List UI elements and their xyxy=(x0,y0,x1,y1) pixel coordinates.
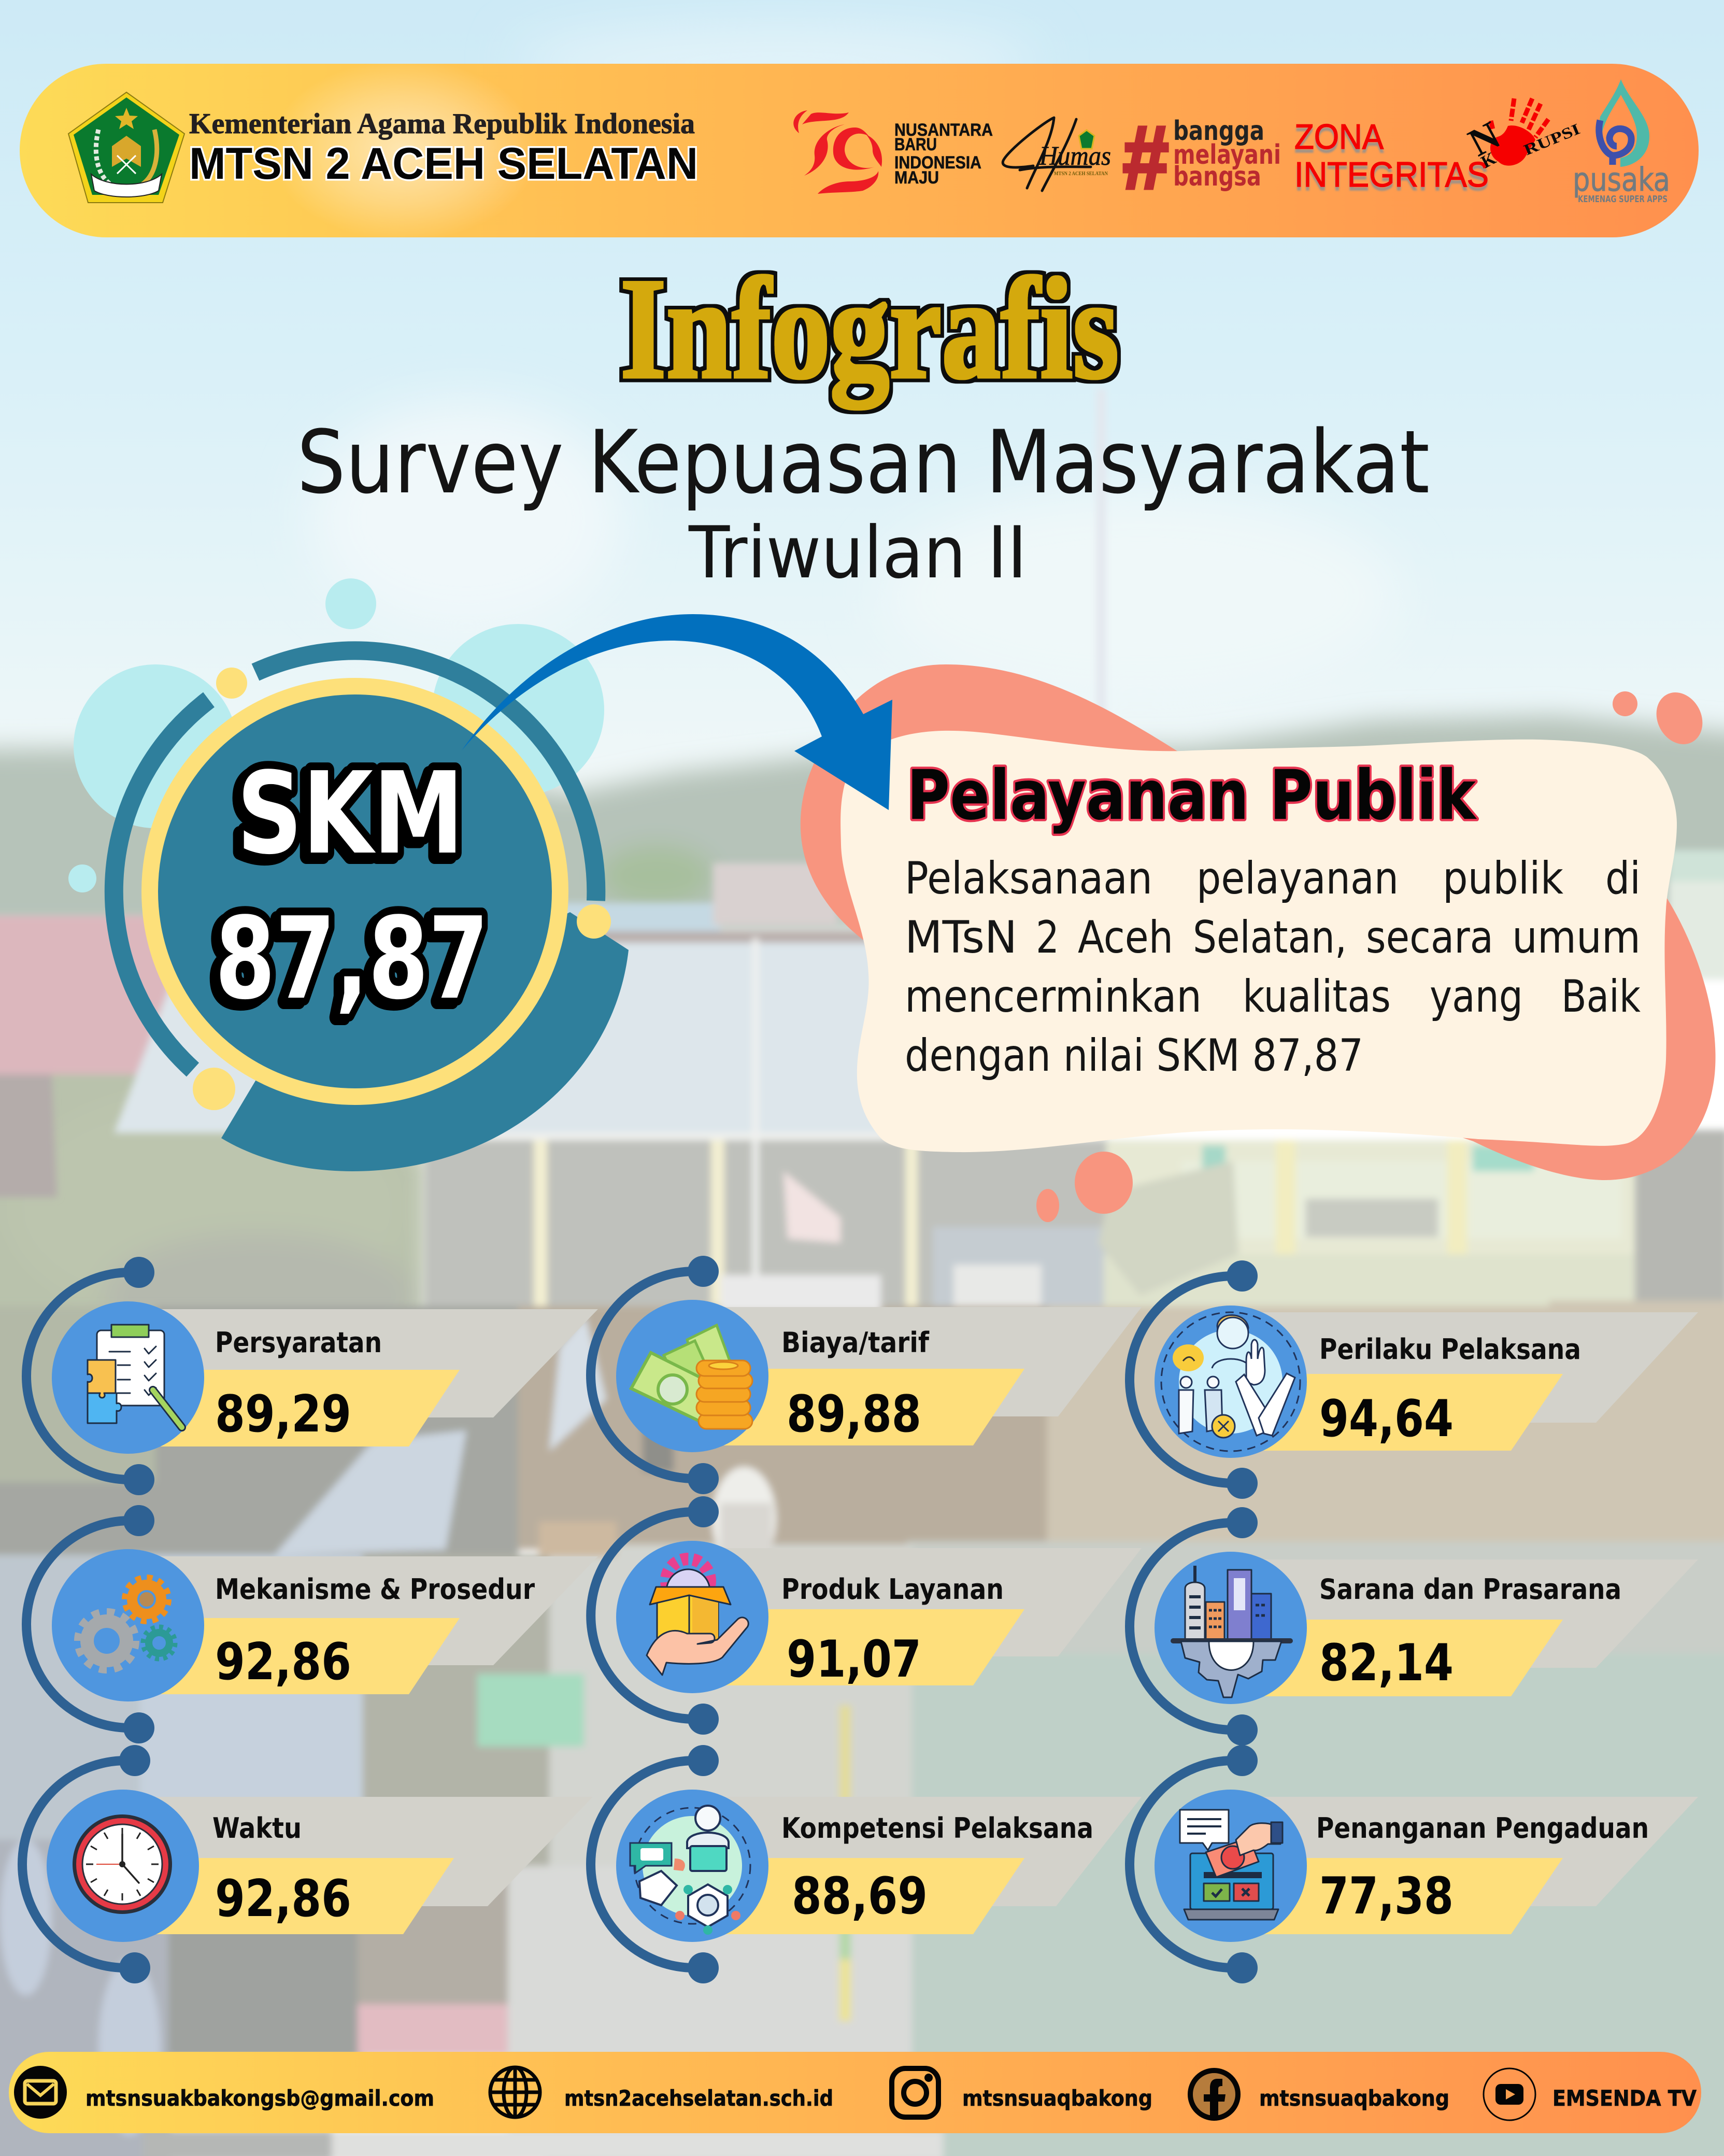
label: Kompetensi Pelaksana xyxy=(781,1812,1093,1845)
value: 89,88 xyxy=(787,1385,921,1444)
icon: complaint laptop xyxy=(1180,1810,1283,1920)
logo tagline: INDONESIA xyxy=(894,153,981,173)
panel body text: mencerminkan xyxy=(905,971,1202,1023)
period: Triwulan II xyxy=(688,511,1027,594)
no korupsi logo: N xyxy=(1462,113,1507,165)
card: Mekanisme & Prosedur xyxy=(26,1505,598,1743)
pusaka logo: pusaka xyxy=(1573,161,1670,198)
panel body text: dengan nilai SKM 87,87 xyxy=(905,1030,1363,1082)
card: Produk Layanan xyxy=(591,1496,1142,1735)
logo tagline xyxy=(894,120,993,188)
label: Mekanisme & Prosedur xyxy=(215,1573,535,1606)
value: 92,86 xyxy=(215,1869,351,1928)
hashtag slogan: bangga xyxy=(1173,116,1264,147)
panel body text xyxy=(905,853,1641,1082)
label: Produk Layanan xyxy=(781,1573,1004,1606)
panel body text: Baik xyxy=(1561,971,1641,1023)
Humas logo: Humas xyxy=(1039,141,1111,171)
icon: service behaviour xyxy=(1161,1312,1300,1451)
subtitle: Survey Kepuasan Masyarakat xyxy=(297,412,1430,513)
arrow xyxy=(462,614,892,810)
panel body text: pelayanan xyxy=(1196,853,1399,904)
icon: youtube xyxy=(1484,2068,1535,2120)
panel body text: Aceh xyxy=(1078,912,1173,963)
icon: gears xyxy=(78,1578,175,1670)
value: 92,86 xyxy=(215,1633,351,1692)
icon: competence xyxy=(630,1806,750,1935)
card: Biaya/tarif xyxy=(591,1256,1142,1494)
no korupsi logo: K xyxy=(1478,149,1500,172)
panel body text: publik xyxy=(1443,853,1563,904)
school name: MTSN 2 ACEH SELATAN xyxy=(189,139,698,189)
hashtag slogan xyxy=(1123,108,1281,207)
card: Waktu xyxy=(22,1745,593,1983)
label: Biaya/tarif xyxy=(781,1326,929,1359)
value: 91,07 xyxy=(787,1630,921,1689)
youtube channel: EMSENDA TV xyxy=(1552,2086,1697,2111)
value: 94,64 xyxy=(1319,1389,1454,1449)
logo tagline: BARU xyxy=(894,135,937,154)
panel body text: yang xyxy=(1430,971,1523,1023)
SKM score badge xyxy=(68,578,629,1171)
panel body text: 2 xyxy=(1036,912,1059,963)
icon: 79 anniversary logo xyxy=(793,110,882,194)
SKM label: SKM xyxy=(237,748,464,880)
icon: email xyxy=(14,2066,67,2119)
zona integritas: ZONA xyxy=(1294,117,1384,157)
panel body text: Selatan, xyxy=(1193,912,1347,963)
card: Penanganan Pengaduan xyxy=(1130,1745,1698,1983)
zona integritas: INTEGRITAS xyxy=(1294,155,1489,194)
panel body text: umum xyxy=(1512,912,1641,963)
label: Perilaku Pelaksana xyxy=(1319,1333,1581,1366)
footer contact bar xyxy=(9,2052,1701,2133)
panel heading: Pelayanan Publik xyxy=(907,756,1477,835)
card: Kompetensi Pelaksana xyxy=(591,1745,1142,1983)
icon: globe xyxy=(490,2067,540,2117)
icon: facebook xyxy=(1190,2070,1238,2119)
pusaka logo: KEMENAG SUPER APPS xyxy=(1578,194,1668,205)
pusaka logo xyxy=(1573,79,1670,205)
panel body text: MTsN xyxy=(905,912,1017,963)
hashtag slogan: melayani xyxy=(1173,139,1281,171)
value: 77,38 xyxy=(1319,1867,1454,1926)
panel body text: secara xyxy=(1366,912,1493,963)
panel: Pelayanan Publik xyxy=(462,614,1716,1222)
title: Infografis: Infografis xyxy=(620,248,1119,412)
value: 89,29 xyxy=(215,1385,351,1444)
label: Sarana dan Prasarana xyxy=(1319,1573,1621,1606)
panel body text: Pelaksanaan xyxy=(905,853,1152,904)
header banner xyxy=(20,60,1699,241)
logo tagline: MAJU xyxy=(894,168,939,188)
value: 88,69 xyxy=(792,1867,928,1926)
no korupsi logo xyxy=(1462,98,1583,172)
logo tagline: NUSANTARA xyxy=(894,120,993,140)
card: Persyaratan xyxy=(26,1257,598,1495)
hashtag slogan: # xyxy=(1123,108,1169,207)
ministry name: Kementerian Agama Republik Indonesia xyxy=(189,108,695,140)
icon: instagram xyxy=(892,2068,938,2117)
zona integritas xyxy=(1294,117,1489,194)
icon: Kementerian Agama emblem xyxy=(68,92,184,203)
label: Penanganan Pengaduan xyxy=(1316,1812,1649,1845)
card: Sarana dan Prasarana xyxy=(1130,1507,1698,1746)
Humas logo xyxy=(1003,118,1111,191)
facebook handle: mtsnsuaqbakong xyxy=(1259,2086,1449,2111)
email address: mtsnsuakbakongsb@gmail.com xyxy=(86,2086,434,2111)
hashtag slogan: bangsa xyxy=(1173,161,1261,192)
icon: city and gear xyxy=(1171,1566,1293,1697)
icon: clipboard and puzzle xyxy=(88,1325,182,1427)
label: Persyaratan xyxy=(215,1326,382,1359)
panel body text: di xyxy=(1605,853,1641,904)
icon: money and coins xyxy=(631,1325,752,1429)
SKM value: 87,87 xyxy=(215,893,489,1025)
no korupsi logo: RUPSI xyxy=(1521,120,1583,159)
label: Waktu xyxy=(212,1812,302,1845)
card: Perilaku Pelaksana xyxy=(1130,1260,1698,1499)
Humas logo: MTSN 2 ACEH SELATAN xyxy=(1054,171,1108,177)
icon: clock xyxy=(73,1814,172,1914)
website: mtsn2acehselatan.sch.id xyxy=(564,2086,833,2111)
panel body text: kualitas xyxy=(1243,971,1391,1023)
icon: box in hand xyxy=(647,1559,748,1675)
value: 82,14 xyxy=(1319,1634,1454,1693)
instagram handle: mtsnsuaqbakong xyxy=(962,2086,1152,2111)
